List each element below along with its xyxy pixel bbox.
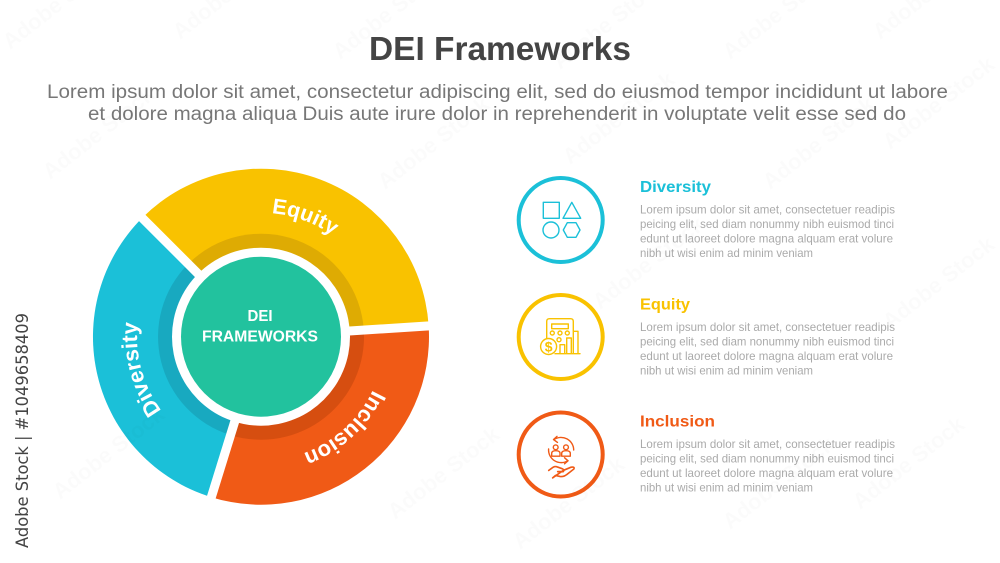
text: Adobe Stock	[758, 91, 880, 194]
subtitle	[47, 82, 948, 125]
label: diversity: Diversity	[121, 322, 160, 418]
heading: equity: Equity	[640, 296, 690, 314]
icon: calculator and coin in ring: $	[545, 338, 553, 354]
heading: diversity: Diversity	[640, 179, 711, 196]
text: equity description: edunt ut laoreet dolore magna alquam erat volure	[640, 349, 893, 363]
text: equity description	[640, 320, 895, 378]
text: Adobe Stock	[373, 91, 495, 194]
label: inclusion: Inclusion	[304, 391, 386, 463]
center circle: DEI	[248, 308, 272, 325]
row: diversity	[519, 178, 895, 262]
text: inclusion description: nibh ut wisi enim ad minim veniam	[640, 480, 813, 494]
center circle: FRAMEWORKS	[202, 329, 318, 346]
heading: inclusion: Inclusion	[640, 414, 715, 430]
text: Adobe Stock	[718, 431, 840, 534]
text: inclusion description: peicing elit, sed diam nonummy nibh euismod tinci	[640, 452, 894, 466]
text: inclusion description	[640, 437, 895, 494]
icon: calculator and coin in ring	[519, 295, 603, 379]
title: DEI Frameworks	[369, 30, 631, 67]
text: Adobe Stock	[878, 51, 1000, 154]
text: Adobe Stock	[558, 66, 680, 169]
text: Adobe Stock	[383, 421, 505, 524]
center circle	[181, 257, 341, 417]
text: equity description: peicing elit, sed diam nonummy nibh euismod tinci	[640, 334, 894, 348]
text: diversity description: nibh ut wisi enim ad minim veniam	[640, 246, 813, 260]
row: inclusion	[519, 412, 895, 496]
text: Adobe Stock	[878, 231, 1000, 334]
text: diversity description: peicing elit, sed diam nonummy nibh euismod tinci	[640, 217, 894, 231]
text: Adobe Stock	[48, 401, 170, 504]
text: inclusion description: edunt ut laoreet dolore magna alquam erat volure	[640, 466, 893, 480]
text: diversity description: edunt ut laoreet dolore magna alquam erat volure	[640, 232, 893, 246]
watermark: stock id: Adobe Stock | #1049658409	[13, 313, 33, 548]
icon: people and hand in ring	[519, 412, 603, 496]
text: diversity description: Lorem ipsum dolor sit amet, consectetuer readipis	[640, 202, 895, 216]
segment: equity	[142, 169, 429, 337]
text: diversity description	[640, 202, 895, 260]
text: Adobe Stock	[588, 211, 710, 314]
text: Adobe Stock	[848, 411, 970, 514]
text: equity description: Lorem ipsum dolor sit amet, consectetuer readipis	[640, 320, 895, 334]
row: equity	[519, 295, 895, 379]
subtitle: Lorem ipsum dolor sit amet, consectetur adipiscing elit, sed do eiusmod tempor incididunt ut labore	[47, 82, 948, 103]
subtitle: et dolore magna aliqua Duis aute irure dolor in reprehenderit in voluptate velit esse sed do	[88, 104, 906, 125]
text: Adobe Stock	[38, 81, 160, 184]
segment: diversity	[93, 218, 261, 497]
circular diagram	[92, 168, 429, 505]
label: equity: Equity	[273, 198, 339, 235]
icon: shapes in ring	[519, 178, 603, 262]
text: Adobe Stock	[508, 451, 630, 554]
text: inclusion description: Lorem ipsum dolor sit amet, consectetuer readipis	[640, 437, 895, 451]
text: equity description: nibh ut wisi enim ad minim veniam	[640, 364, 813, 378]
segment: inclusion	[211, 326, 429, 505]
